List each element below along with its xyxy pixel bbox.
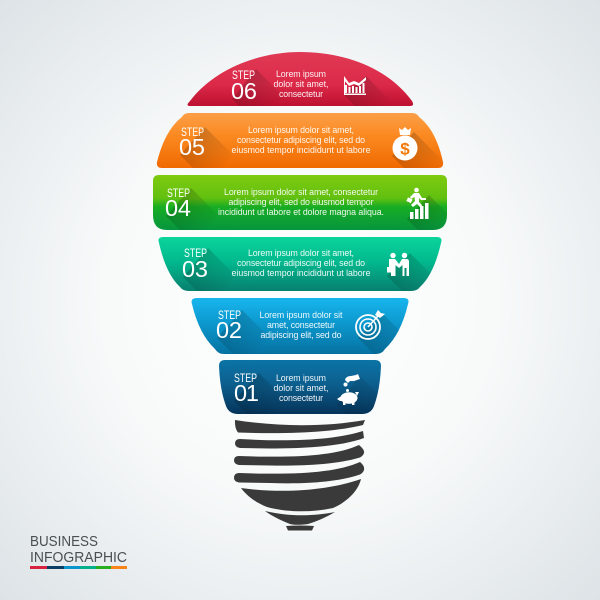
step 06 text: Lorem ipsum bbox=[276, 69, 326, 79]
step 03 text: eiusmod tempor incididunt ut labore bbox=[232, 268, 371, 278]
step 03 text: Lorem ipsum dolor sit amet, bbox=[248, 248, 354, 258]
step 01 text: dolor sit amet, bbox=[274, 383, 328, 393]
step 02 text: Lorem ipsum dolor sit bbox=[260, 310, 343, 320]
panel: step 02 bbox=[192, 298, 408, 354]
step 06 text bbox=[274, 69, 328, 99]
step 05 label: 05 bbox=[179, 134, 205, 160]
step 01 text bbox=[274, 373, 328, 403]
logo colour bar bbox=[30, 566, 127, 569]
step 03 label: 03 bbox=[182, 256, 208, 282]
step 02 label: STEP bbox=[218, 310, 241, 322]
step 01 text: consectetur bbox=[279, 393, 323, 403]
step 04 text: adipiscing elit, sed do eiusmod tempor bbox=[228, 197, 374, 207]
icon: handshake bbox=[387, 253, 409, 276]
icon: bar chart bbox=[344, 76, 366, 95]
step 05 text: eiusmod tempor incididunt ut labore bbox=[232, 145, 371, 155]
lightbulb screw base bbox=[234, 420, 365, 530]
panel: step 03 bbox=[158, 237, 442, 291]
step 05 text bbox=[232, 125, 371, 155]
step 02 text: adipiscing elit, sed do bbox=[260, 330, 342, 340]
step 06 label: 06 bbox=[231, 78, 257, 104]
step 06 text: dolor sit amet, bbox=[274, 79, 328, 89]
step 02 label: 02 bbox=[216, 317, 242, 343]
step 06 label: STEP bbox=[232, 70, 255, 82]
step 01 label: 01 bbox=[234, 380, 259, 406]
panel: step 01 bbox=[219, 360, 381, 414]
icon: money bag: $ bbox=[400, 140, 410, 158]
icon: runner on rising bars bbox=[406, 188, 428, 219]
panel: step 06 bbox=[188, 52, 414, 106]
icon: target with arrow bbox=[356, 310, 385, 339]
step 01 label: STEP bbox=[234, 373, 257, 385]
panel: step 05 bbox=[156, 113, 444, 168]
step 04 text bbox=[218, 187, 384, 217]
step 03 label: STEP bbox=[184, 248, 207, 260]
step 04 text: incididunt ut labore et dolore magna aliqua. bbox=[218, 207, 384, 217]
icon: money bag bbox=[392, 127, 418, 160]
step 03 text: consectetur adipiscing elit, sed do bbox=[237, 258, 365, 268]
step 04 label: 04 bbox=[165, 195, 191, 221]
step 02 text bbox=[260, 310, 343, 340]
step 04 text: Lorem ipsum dolor sit amet, consectetur bbox=[224, 187, 378, 197]
step 03 text bbox=[232, 248, 371, 278]
step 04 label: STEP bbox=[167, 188, 190, 200]
logo: business infographic: BUSINESS bbox=[30, 534, 98, 550]
step 01 text: Lorem ipsum bbox=[276, 373, 326, 383]
panel: step 04 bbox=[153, 175, 447, 230]
step 06 text: consectetur bbox=[279, 89, 323, 99]
icon: coin and piggy bank bbox=[337, 374, 360, 405]
step 05 label: STEP bbox=[181, 127, 204, 139]
logo: business infographic bbox=[30, 534, 127, 569]
step 05 text: Lorem ipsum dolor sit amet, bbox=[248, 125, 354, 135]
logo: business infographic: INFOGRAPHIC bbox=[30, 550, 127, 566]
step 05 text: consectetur adipiscing elit, sed do bbox=[237, 135, 365, 145]
step 02 text: amet, consectetur bbox=[267, 320, 335, 330]
